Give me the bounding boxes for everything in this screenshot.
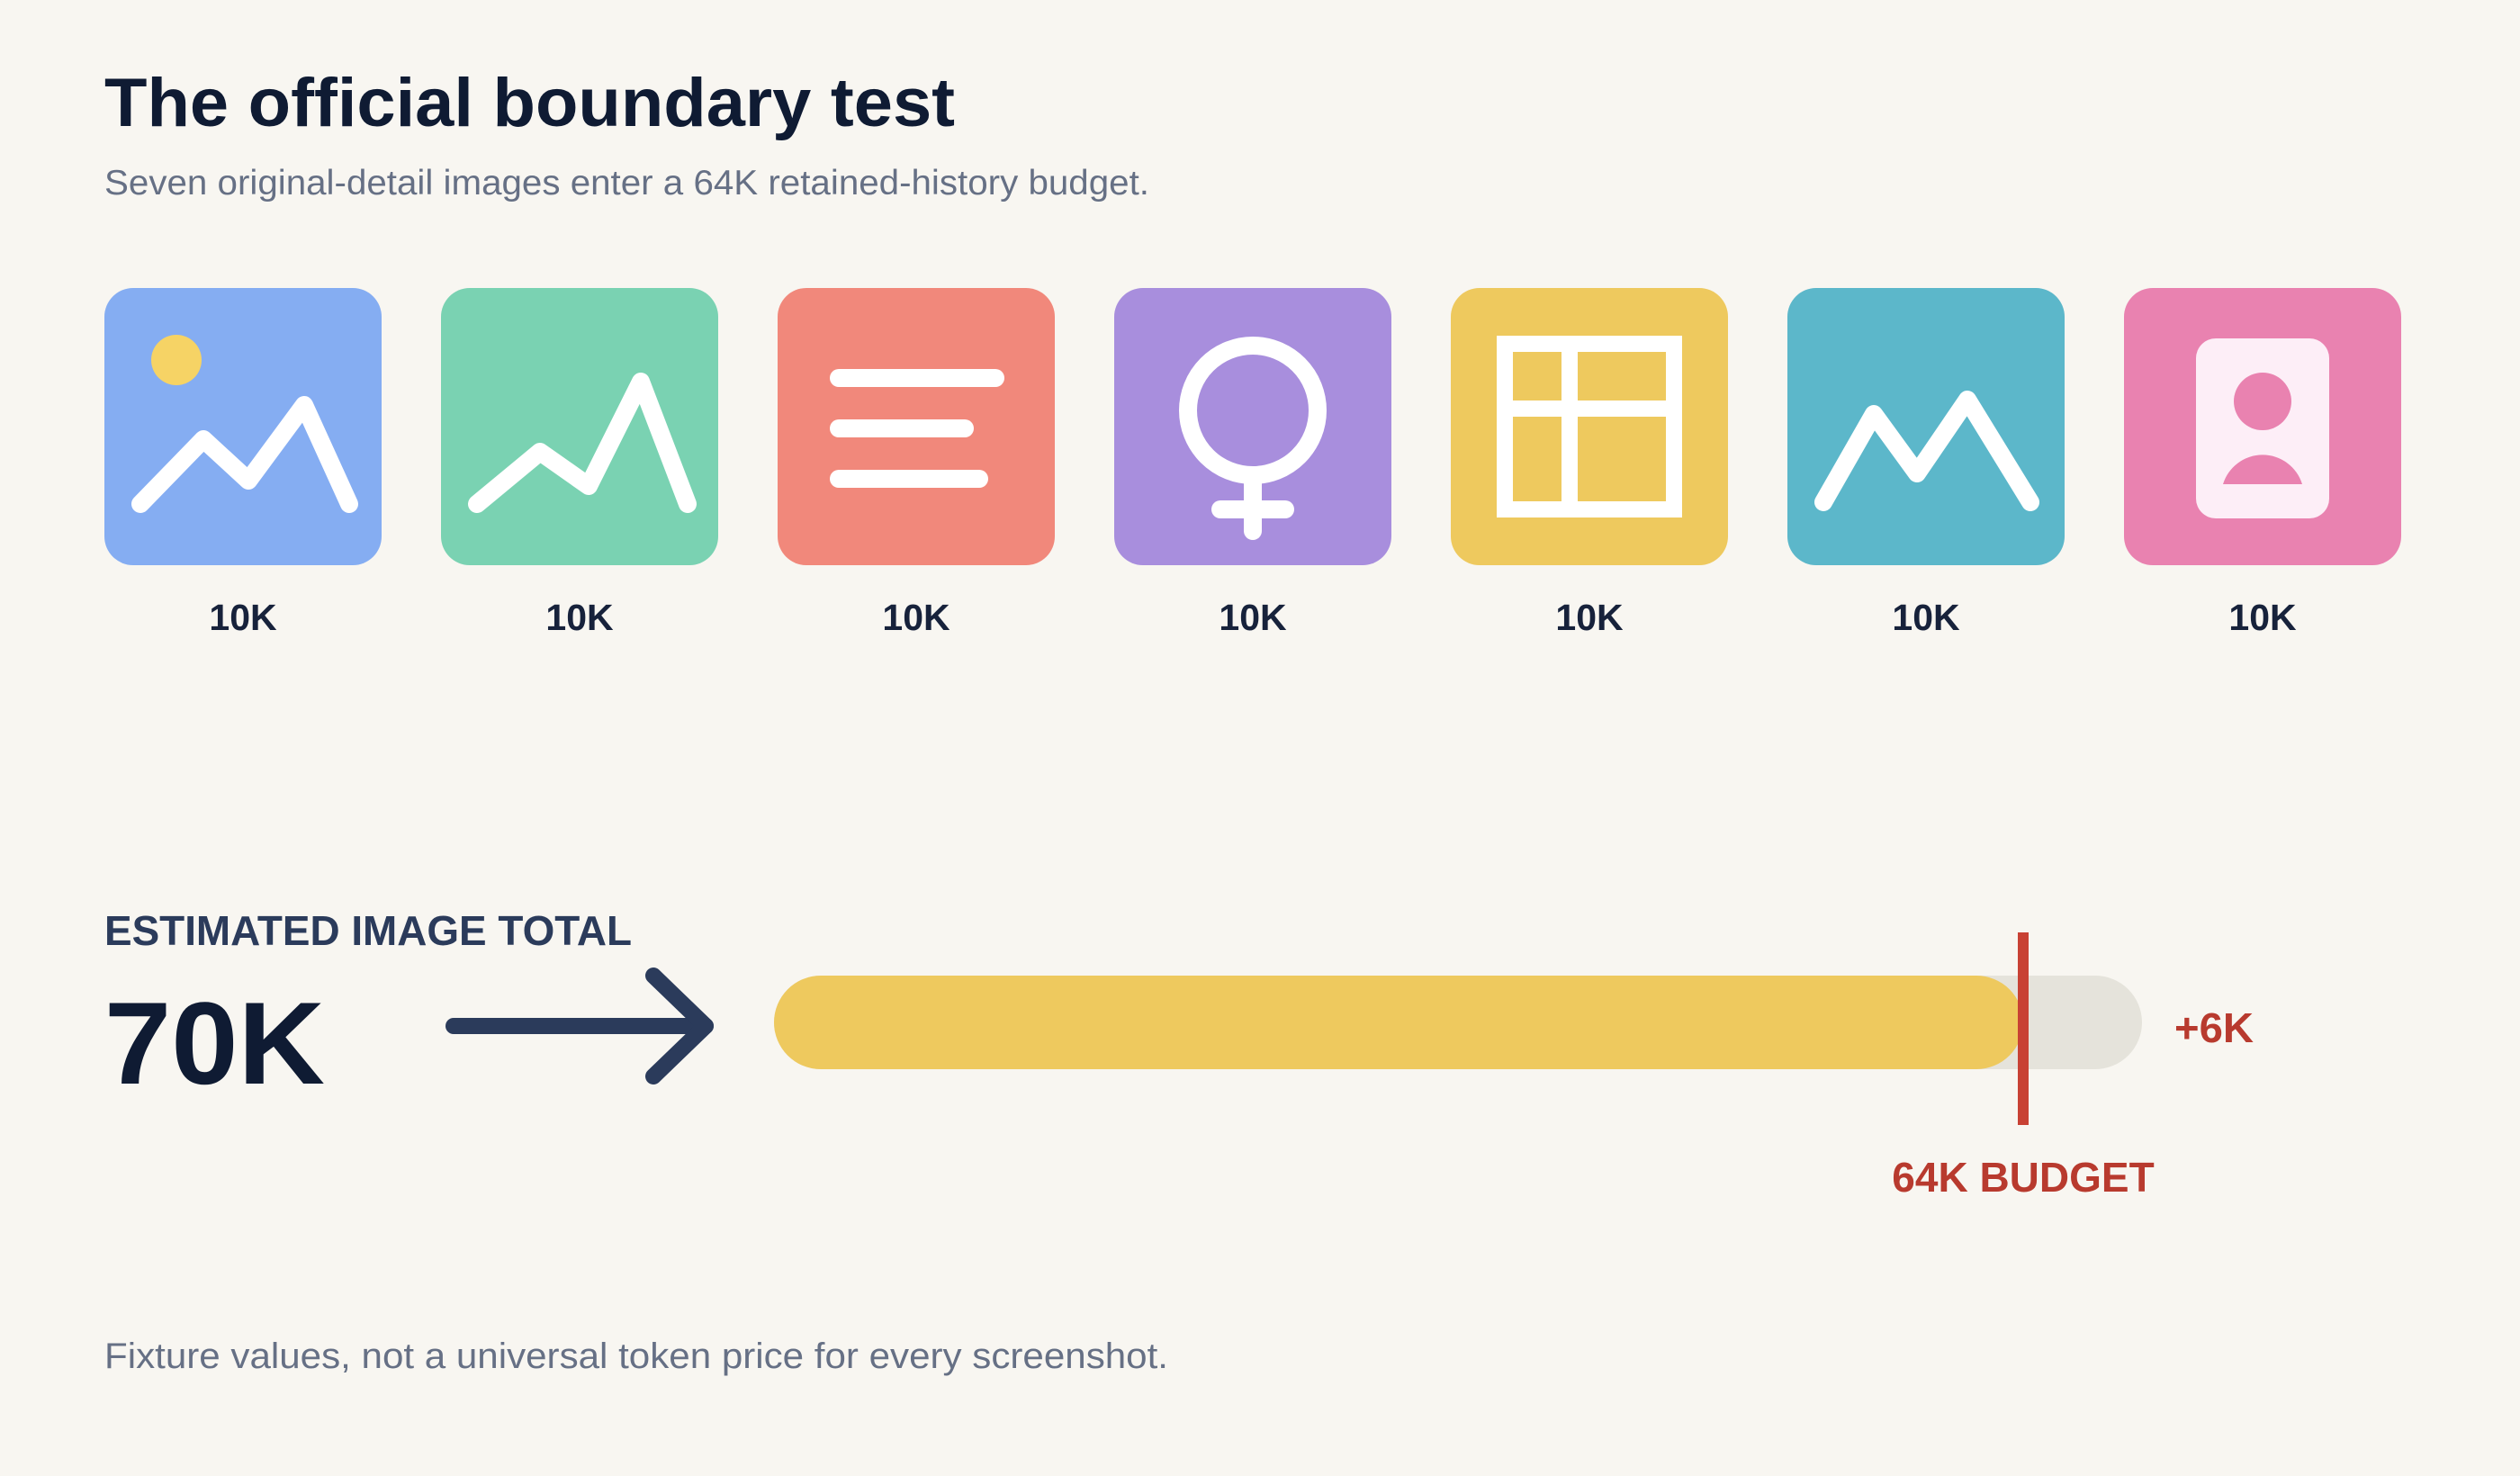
overage label: +6K: [2174, 1004, 2254, 1051]
image card 4: venus symbol: [1114, 288, 1391, 565]
budget label: 64K BUDGET: [1892, 1154, 2155, 1201]
label: card 2 estimate: 10K: [545, 597, 614, 638]
label: card 3 estimate: 10K: [882, 597, 950, 638]
big number: 70K: 70K: [104, 977, 325, 1109]
label: card 1 estimate: 10K: [209, 597, 277, 638]
bar track: [774, 976, 2142, 1069]
footnote: Fixture values, not a universal token price for every screenshot.: [104, 1336, 1168, 1376]
bar chart: total against budget: [774, 932, 2142, 1125]
image card 7: portrait: [2124, 288, 2401, 565]
image card 1: landscape: [104, 288, 382, 565]
image card 2: line chart: [441, 288, 718, 565]
bar fill: 64K: [774, 976, 2023, 1069]
image card 6: mountains: [1787, 288, 2065, 565]
panel: image row: [104, 288, 2401, 638]
subtitle: Seven original-detail images enter a 64K retained-history budget.: [104, 164, 1149, 202]
label: card 5 estimate: 10K: [1555, 597, 1624, 638]
label: card 4 estimate: 10K: [1219, 597, 1287, 638]
heading: estimated image total: ESTIMATED IMAGE TOTAL: [104, 907, 632, 954]
image card 5: table grid: [1451, 288, 1728, 565]
label: card 7 estimate: 10K: [2228, 597, 2297, 638]
label: card 6 estimate: 10K: [1892, 597, 1960, 638]
budget marker: [2018, 932, 2029, 1125]
image card 3: text lines: [778, 288, 1055, 565]
arrow: [454, 976, 706, 1076]
title: The official boundary test: [104, 65, 955, 141]
